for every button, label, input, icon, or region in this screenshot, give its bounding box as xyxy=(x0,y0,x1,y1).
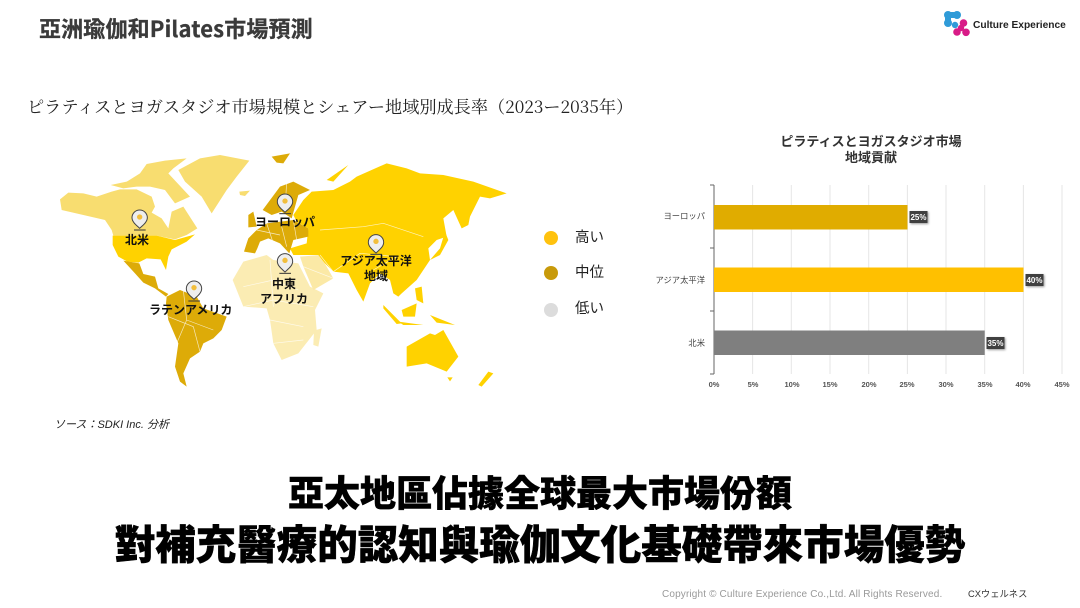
region: Middle East xyxy=(300,255,333,290)
subtitle: ピラティスとヨガスタジオ市場規模とシェアー地域別成長率（2023ー2035年） xyxy=(27,93,633,118)
legend: low xyxy=(544,300,604,317)
footer label: CXウェルネス xyxy=(968,589,1027,599)
x axis labels: 0% xyxy=(709,380,720,389)
copyright footer: Copyright © Culture Experience Co.,Ltd. All Rights Reserved. xyxy=(662,589,942,600)
marker: asia pacific xyxy=(368,235,384,254)
world map xyxy=(60,153,506,387)
marker: europe xyxy=(277,194,293,214)
bar chart: 地域貢献 xyxy=(845,150,897,165)
x axis labels: 10% xyxy=(784,380,800,389)
map label: europe: ヨーロッパ xyxy=(255,215,315,229)
bar chart xyxy=(656,134,1070,389)
source note: ソース：SDKI Inc. 分析 xyxy=(54,419,169,431)
bar: North America xyxy=(688,330,1004,355)
map label: asia pacific xyxy=(340,254,412,283)
logo: Culture Experience xyxy=(944,11,1066,36)
conclusion headline: 亞太地區佔據全球最大市場份額 xyxy=(288,473,792,514)
conclusion headline xyxy=(115,473,966,568)
bar: Asia Pacific: アジア太平洋 xyxy=(656,275,705,285)
region: Africa xyxy=(233,255,323,360)
marker: latin america xyxy=(186,281,202,301)
marker: north america xyxy=(132,210,147,230)
region: Latin America xyxy=(123,261,227,387)
bar: North America: 35% xyxy=(987,339,1004,348)
map label: middle east africa: 中東 xyxy=(272,277,296,291)
x axis labels: 35% xyxy=(977,380,993,389)
x axis labels: 25% xyxy=(899,380,915,389)
legend: medium xyxy=(544,264,604,281)
conclusion headline: 對補充醫療的認知與瑜伽文化基礎帶來市場優勢 xyxy=(115,522,965,568)
bar: North America: 北米 xyxy=(688,338,706,348)
country borders xyxy=(168,182,423,352)
x axis labels: 40% xyxy=(1015,380,1031,389)
map label: asia pacific: 地域 xyxy=(364,269,388,283)
region: Asia Pacific xyxy=(290,163,507,387)
logo: Culture Experience: Culture Experience xyxy=(973,20,1066,31)
bar: Asia Pacific xyxy=(656,268,1044,292)
x axis labels: 20% xyxy=(861,380,877,389)
region: North America north xyxy=(60,155,250,239)
map label: asia pacific: アジア太平洋 xyxy=(340,254,412,268)
x axis labels: 45% xyxy=(1054,380,1070,389)
x axis labels: 15% xyxy=(822,380,838,389)
map label: north america: 北米 xyxy=(125,233,149,247)
legend: high xyxy=(544,229,604,246)
map label: middle east africa xyxy=(260,277,308,306)
marker: middle east africa xyxy=(277,254,293,273)
bar: Europe xyxy=(664,205,928,230)
bar: Europe: 25% xyxy=(910,213,927,222)
legend xyxy=(544,229,604,317)
legend: low: 低い xyxy=(575,301,604,317)
bar: Asia Pacific: 40% xyxy=(1026,276,1043,285)
x axis labels xyxy=(709,380,1070,389)
region: United States xyxy=(113,234,195,270)
bar: Europe: ヨーロッパ xyxy=(664,211,705,221)
map label: latin america: ラテンアメリカ xyxy=(149,303,232,317)
title: 亞洲瑜伽和Pilates市場預測 xyxy=(39,12,313,44)
legend: high: 高い xyxy=(575,230,604,246)
region: Europe xyxy=(244,153,310,253)
x axis labels: 5% xyxy=(748,380,759,389)
x axis labels: 30% xyxy=(938,380,954,389)
legend: medium: 中位 xyxy=(575,265,604,281)
chart title: ピラティスとヨガスタジオ市場 xyxy=(780,134,962,149)
map label: middle east africa: アフリカ xyxy=(260,292,308,306)
